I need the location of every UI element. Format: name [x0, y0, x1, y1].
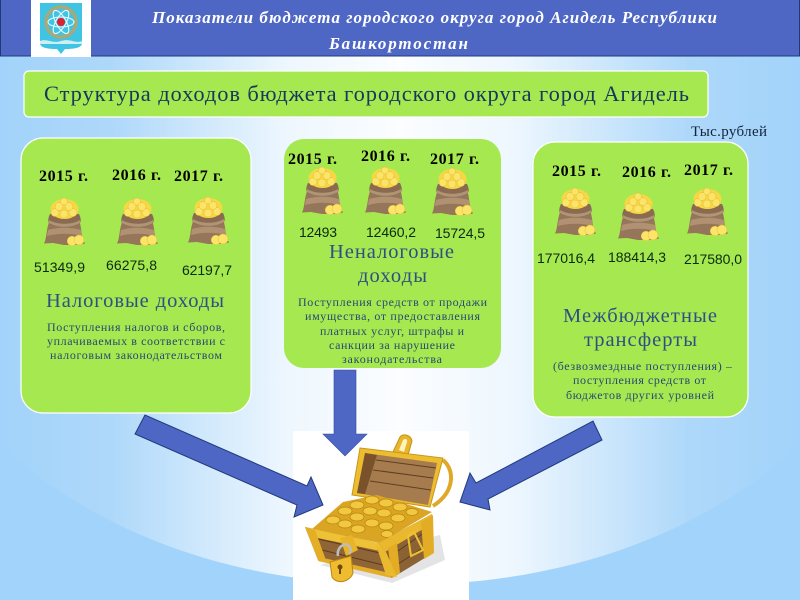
panel: intergovernmental transfers: поступления средств от — [573, 373, 707, 387]
title: Показатели бюджета городского округа город Агидель Республики — [151, 8, 717, 27]
panel: non-tax revenue — [284, 139, 501, 368]
panel: tax revenue: Поступления налогов и сборов, — [47, 320, 225, 334]
panel: tax revenue — [21, 138, 251, 413]
panel: non-tax revenue: санкции за нарушение — [329, 338, 455, 352]
panel: intergovernmental transfers: 188414,3 — [608, 249, 666, 265]
panel: non-tax revenue: 2015 г. — [288, 151, 337, 168]
arrow: transfers to chest — [460, 421, 602, 510]
open lid — [352, 448, 443, 507]
background — [76, 56, 725, 582]
panel: non-tax revenue: 12493 — [299, 224, 337, 240]
panel: intergovernmental transfers: (безвозмездные поступления) – — [553, 359, 733, 373]
arrow: non-tax revenue to chest — [323, 370, 367, 456]
panel: tax revenue: Налоговые доходы — [46, 290, 224, 312]
panel: intergovernmental transfers: 177016,4 — [537, 250, 595, 266]
panel: non-tax revenue: Неналоговые — [329, 241, 454, 263]
panel: non-tax revenue: платных услуг, штрафы и — [320, 324, 465, 338]
icon: city emblem — [31, 0, 91, 57]
panel: non-tax revenue: 2016 г. — [361, 148, 410, 165]
panel: intergovernmental transfers: трансферты — [584, 329, 697, 351]
panel: non-tax revenue: законодательства — [342, 352, 443, 366]
panel: tax revenue: 66275,8 — [106, 257, 157, 273]
chest body front — [305, 527, 392, 578]
header bar — [0, 0, 800, 56]
panel: intergovernmental transfers: 2017 г. — [684, 162, 733, 179]
panel: intergovernmental transfers: 217580,0 — [684, 251, 742, 267]
unit label: Тыс.рублей — [691, 124, 767, 140]
chest body side — [378, 514, 433, 578]
panel: section heading — [24, 71, 708, 117]
panel: intergovernmental transfers — [533, 142, 748, 417]
panel: tax revenue: уплачиваемых в соответствии с — [47, 334, 225, 348]
panel: non-tax revenue: имущества, от предоставления — [305, 309, 480, 323]
padlock — [338, 544, 351, 556]
panel: tax revenue: налоговым законодательством — [50, 348, 222, 362]
panel: intergovernmental transfers: 2015 г. — [552, 163, 601, 180]
side strap — [433, 460, 451, 506]
panel: non-tax revenue: Поступления средств от продажи — [298, 295, 488, 309]
arrow: tax revenue to chest — [135, 415, 323, 517]
panel: tax revenue: 2017 г. — [174, 168, 223, 185]
panel: tax revenue: 62197,7 — [182, 262, 232, 278]
treasure chest — [293, 431, 469, 600]
panel: tax revenue: 51349,9 — [34, 259, 85, 275]
panel: non-tax revenue: 2017 г. — [430, 151, 479, 168]
panel: intergovernmental transfers: Межбюджетные — [563, 305, 717, 327]
panel: non-tax revenue: доходы — [358, 265, 427, 287]
panel: tax revenue: 2015 г. — [39, 168, 88, 185]
panel: section heading: Структура доходов бюджета городского округа город Агидель — [44, 81, 689, 106]
title — [151, 8, 717, 53]
coin mound — [312, 495, 432, 543]
panel: intergovernmental transfers: 2016 г. — [622, 164, 671, 181]
title: Башкортостан — [328, 34, 468, 53]
panel: intergovernmental transfers: бюджетов других уровней — [566, 388, 715, 402]
panel: non-tax revenue: 12460,2 — [366, 224, 416, 240]
shadow — [320, 535, 445, 583]
lid handle — [393, 435, 412, 455]
panel: non-tax revenue: 15724,5 — [435, 225, 485, 241]
panel: tax revenue: 2016 г. — [112, 167, 161, 184]
